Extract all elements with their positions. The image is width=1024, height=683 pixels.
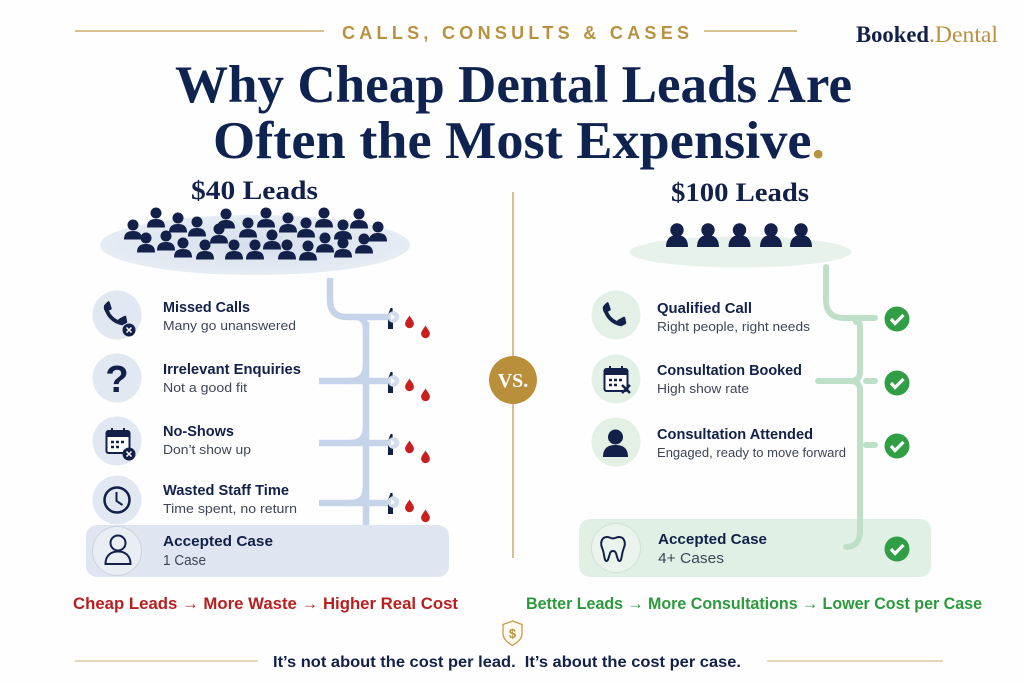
healthy pipe <box>818 267 875 547</box>
row: missed calls: Missed Calls <box>163 300 250 316</box>
crowd of many people <box>124 208 387 260</box>
title <box>175 56 852 170</box>
logo <box>856 22 998 48</box>
icon: dollar shield: $ <box>509 626 517 641</box>
row: no-shows: Don’t show up <box>163 442 251 457</box>
logo: .Dental <box>929 22 998 48</box>
row: no-shows <box>92 416 251 466</box>
accepted case bar: Accepted Case <box>658 531 767 548</box>
title: Often the Most Expensive . <box>213 112 825 170</box>
row: consultation attended: Consultation Attended <box>657 427 813 443</box>
five people <box>666 223 812 247</box>
row: consultation attended: Engaged, ready to move forward <box>657 445 846 460</box>
divider with VS badge: VS. <box>498 370 528 392</box>
bottom message: It’s not about the cost per lead. It’s about the cost per case. <box>273 654 741 671</box>
row: irrelevant enquiries: ? <box>105 359 129 401</box>
row: qualified call: Qualified Call <box>657 301 752 317</box>
row: consultation attended <box>592 418 910 466</box>
left takeaway: Cheap Leads → More Waste → Higher Real Cost <box>73 594 458 613</box>
row: no-shows: No-Shows <box>163 424 234 440</box>
accepted case bar: 4+ Cases <box>658 551 724 567</box>
accepted case bar: Accepted Case <box>163 533 273 550</box>
check: accepted case <box>884 536 910 562</box>
leaking pipe <box>319 278 430 525</box>
row: wasted staff time <box>92 476 297 524</box>
panel: $40 leads <box>86 176 449 577</box>
accepted case bar <box>579 519 931 577</box>
right takeaway: Better Leads → More Consultations → Lower Cost per Case <box>526 594 982 613</box>
row: qualified call <box>592 290 910 340</box>
row: irrelevant enquiries <box>92 354 301 402</box>
heading: $40 leads: $40 Leads <box>191 176 318 205</box>
icon: dollar shield <box>503 621 522 646</box>
logo: Booked <box>856 22 929 48</box>
accepted case bar: 1 Case <box>163 553 206 569</box>
panel: $100 leads <box>579 178 931 577</box>
row: irrelevant enquiries: Irrelevant Enquiries <box>163 362 301 378</box>
heading: $100 leads: $100 Leads <box>671 178 809 207</box>
row: irrelevant enquiries: Not a good fit <box>163 380 247 395</box>
title: Why Cheap Dental Leads Are <box>175 56 852 114</box>
divider with VS badge <box>489 192 537 558</box>
row: missed calls: Many go unanswered <box>163 318 296 333</box>
header eyebrow: CALLS, CONSULTS & CASES <box>342 23 689 43</box>
row: qualified call: Right people, right needs <box>657 319 811 334</box>
platform ellipse <box>100 215 410 275</box>
row: wasted staff time: Wasted Staff Time <box>163 483 289 499</box>
row: wasted staff time: Time spent, no return <box>163 501 297 516</box>
accepted case bar <box>86 525 449 577</box>
platform ellipse <box>630 236 852 268</box>
row: missed calls <box>92 290 296 340</box>
row: consultation booked <box>592 354 910 404</box>
row: consultation booked: High show rate <box>657 381 749 396</box>
row: consultation booked: Consultation Booked <box>657 363 802 379</box>
